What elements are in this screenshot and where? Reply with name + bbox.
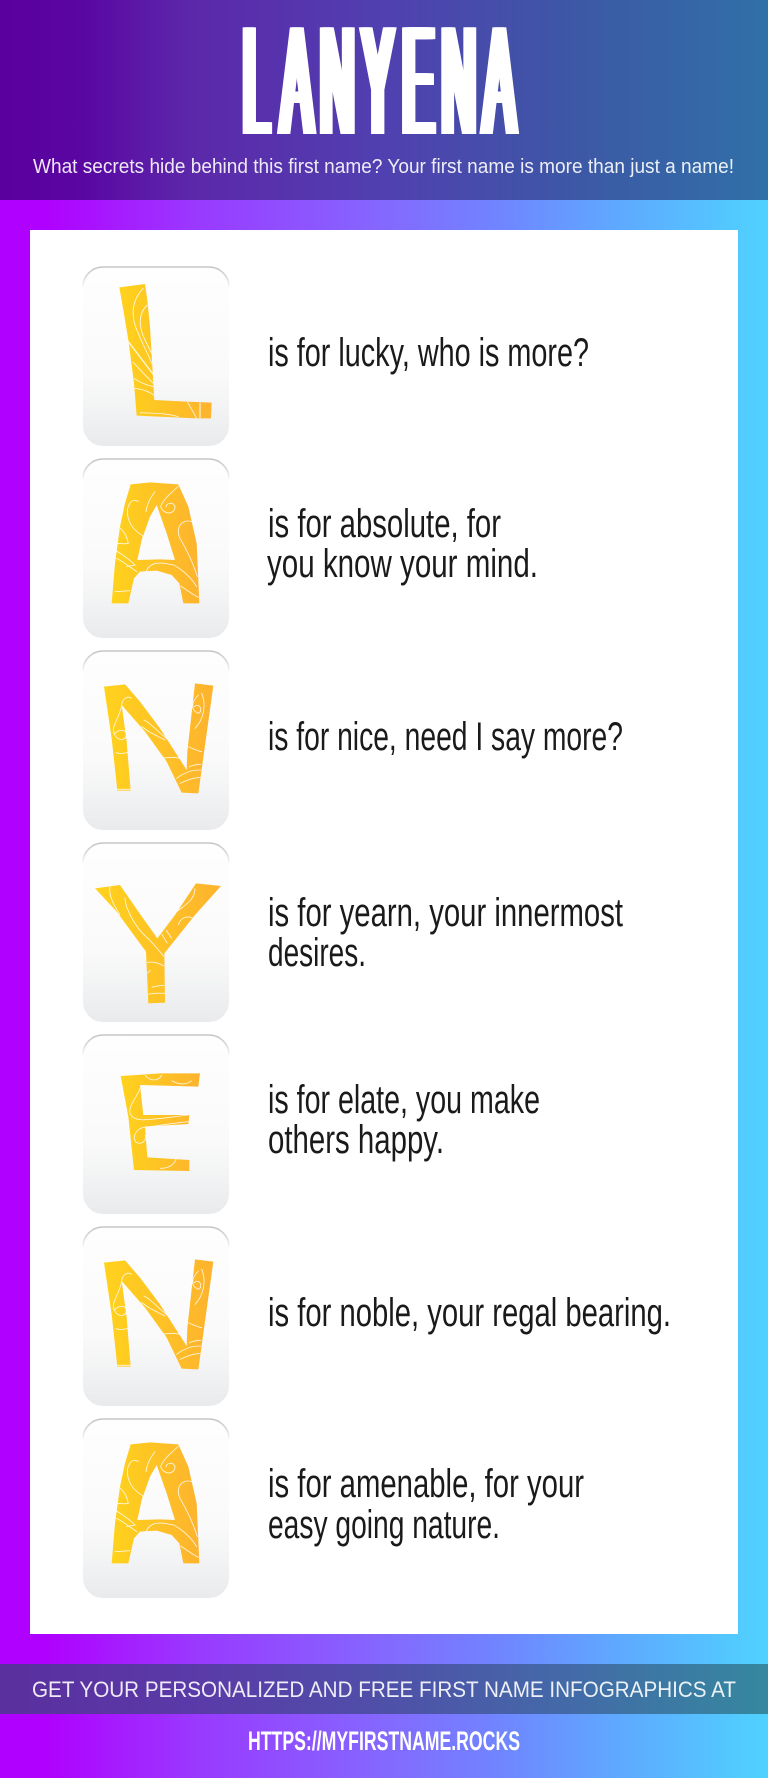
white content panel (30, 230, 738, 1634)
icon: letter Y tile (83, 843, 229, 1022)
header band (0, 0, 768, 200)
row 5: E (83, 1035, 540, 1214)
row 1: L (83, 267, 589, 446)
text: E lines (268, 1078, 540, 1162)
footer band (0, 1664, 768, 1714)
text: A lines: is for amenable, for your (268, 1462, 584, 1506)
text: Y lines: desires. (268, 931, 366, 975)
row 4: Y (83, 843, 623, 1022)
footer url: HTTPS://MYFIRSTNAME.ROCKS (248, 1726, 520, 1756)
icon: letter E tile (83, 1035, 229, 1214)
footer text: GET YOUR PERSONALIZED AND FREE FIRST NAME INFOGRAPHICS AT (32, 1677, 736, 1702)
subtitle: What secrets hide behind this first name? Your first name is more than just a name! (33, 156, 734, 178)
text: A lines (268, 1462, 584, 1547)
text: E lines: is for elate, you make (268, 1078, 540, 1122)
icon: letter N tile (83, 651, 229, 830)
icon: letter L tile (83, 267, 229, 446)
row 7: A (83, 1419, 584, 1598)
icon: letter N tile (83, 1227, 229, 1406)
text: L line: is for lucky, who is more? (268, 331, 589, 375)
row 3: N (83, 651, 623, 830)
text: A lines: easy going nature. (268, 1503, 500, 1547)
text: N line: is for nice, need I say more? (268, 715, 623, 759)
icon: letter A tile (83, 459, 229, 638)
row 2: A (83, 459, 538, 638)
text: A lines: you know your mind. (267, 542, 538, 586)
text: Y lines: is for yearn, your innermost (268, 891, 623, 935)
row 6: N (83, 1227, 671, 1406)
text: Y lines (268, 891, 623, 975)
title (242, 0, 520, 167)
icon: letter A tile (83, 1419, 229, 1598)
text: E lines: others happy. (268, 1118, 444, 1162)
text: A lines: is for absolute, for (268, 502, 501, 546)
text: A lines (267, 502, 538, 586)
